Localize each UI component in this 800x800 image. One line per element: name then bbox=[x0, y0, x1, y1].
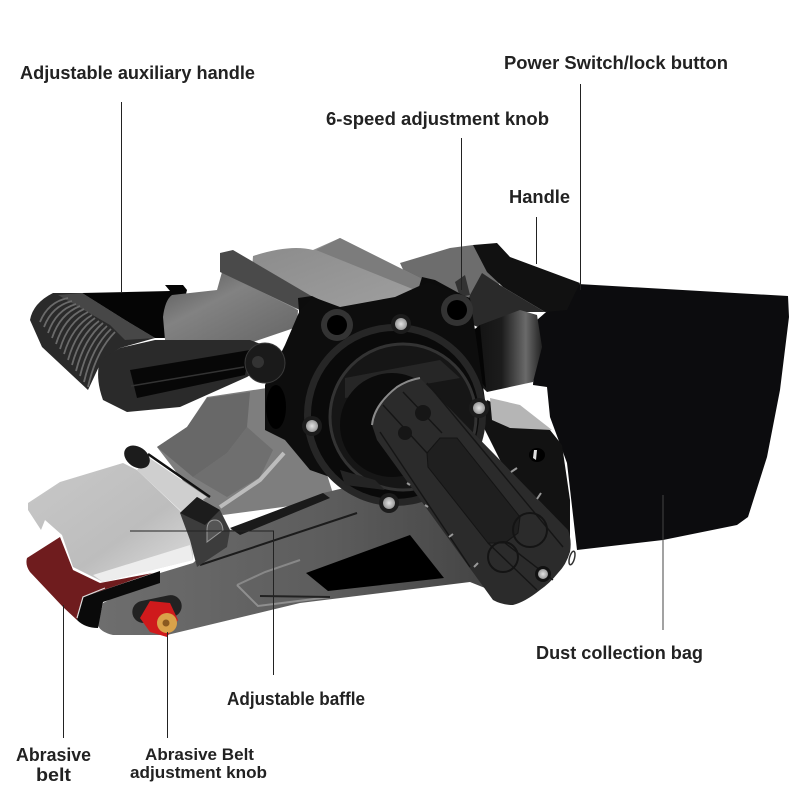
label: power switch: Power Switch/lock button bbox=[504, 53, 728, 73]
leader line: adjustable auxiliary handle bbox=[120, 102, 122, 292]
ribbed grip bbox=[30, 293, 155, 390]
oval recess bbox=[266, 385, 286, 429]
side clamp bars bbox=[220, 250, 468, 345]
hinge bbox=[180, 497, 230, 567]
auxiliary handle bbox=[30, 272, 298, 412]
leader line: power switch bbox=[580, 84, 582, 290]
dust port bbox=[452, 310, 542, 392]
label: abrasive belt: belt bbox=[36, 765, 71, 785]
motor cylinder bbox=[163, 272, 298, 342]
leader line: baffle bbox=[130, 531, 274, 675]
abrasive belt bbox=[26, 537, 160, 628]
rear motor housing bbox=[250, 238, 500, 325]
leader line: handle bbox=[536, 217, 538, 264]
sander base bbox=[98, 470, 490, 635]
leader line: speed knob bbox=[460, 138, 462, 290]
leader line: abrasive belt bbox=[62, 605, 64, 738]
label: speed knob: 6-speed adjustment knob bbox=[326, 109, 549, 129]
flange holes bbox=[321, 309, 353, 341]
label: handle: Handle bbox=[509, 187, 570, 207]
label: dust collection bag: Dust collection bag bbox=[536, 643, 703, 663]
right rear housing bbox=[480, 398, 570, 550]
handle back arch bbox=[82, 285, 187, 338]
label: abrasive belt adjustment knob: adjustment knob bbox=[130, 763, 267, 782]
motor flange bbox=[265, 282, 489, 513]
leader line: belt knob bbox=[166, 632, 168, 738]
zipper pull bbox=[568, 551, 576, 565]
label: abrasive belt: Abrasive bbox=[16, 745, 91, 765]
label: abrasive belt adjustment knob bbox=[130, 745, 267, 782]
cover screw bbox=[535, 566, 551, 582]
middle body bbox=[157, 388, 335, 515]
flange screws bbox=[391, 314, 411, 334]
lower arm bbox=[98, 340, 285, 412]
leader line: dust bag bbox=[662, 495, 664, 630]
rear handle bbox=[462, 243, 580, 328]
belt adjustment knob bbox=[130, 593, 184, 637]
belt cover plate bbox=[372, 378, 571, 605]
dust collection bag bbox=[533, 284, 789, 550]
label: adjustable baffle: Adjustable baffle bbox=[227, 689, 365, 709]
label: abrasive belt adjustment knob: Abrasive Belt bbox=[145, 745, 254, 764]
recessed octagon bbox=[427, 438, 520, 543]
knob ball bbox=[245, 343, 285, 383]
label: abrasive belt bbox=[16, 745, 91, 785]
roller bbox=[137, 457, 207, 513]
label: adjustable auxiliary handle: Adjustable auxiliary handle bbox=[20, 63, 255, 83]
adjustable baffle plate bbox=[28, 441, 230, 582]
